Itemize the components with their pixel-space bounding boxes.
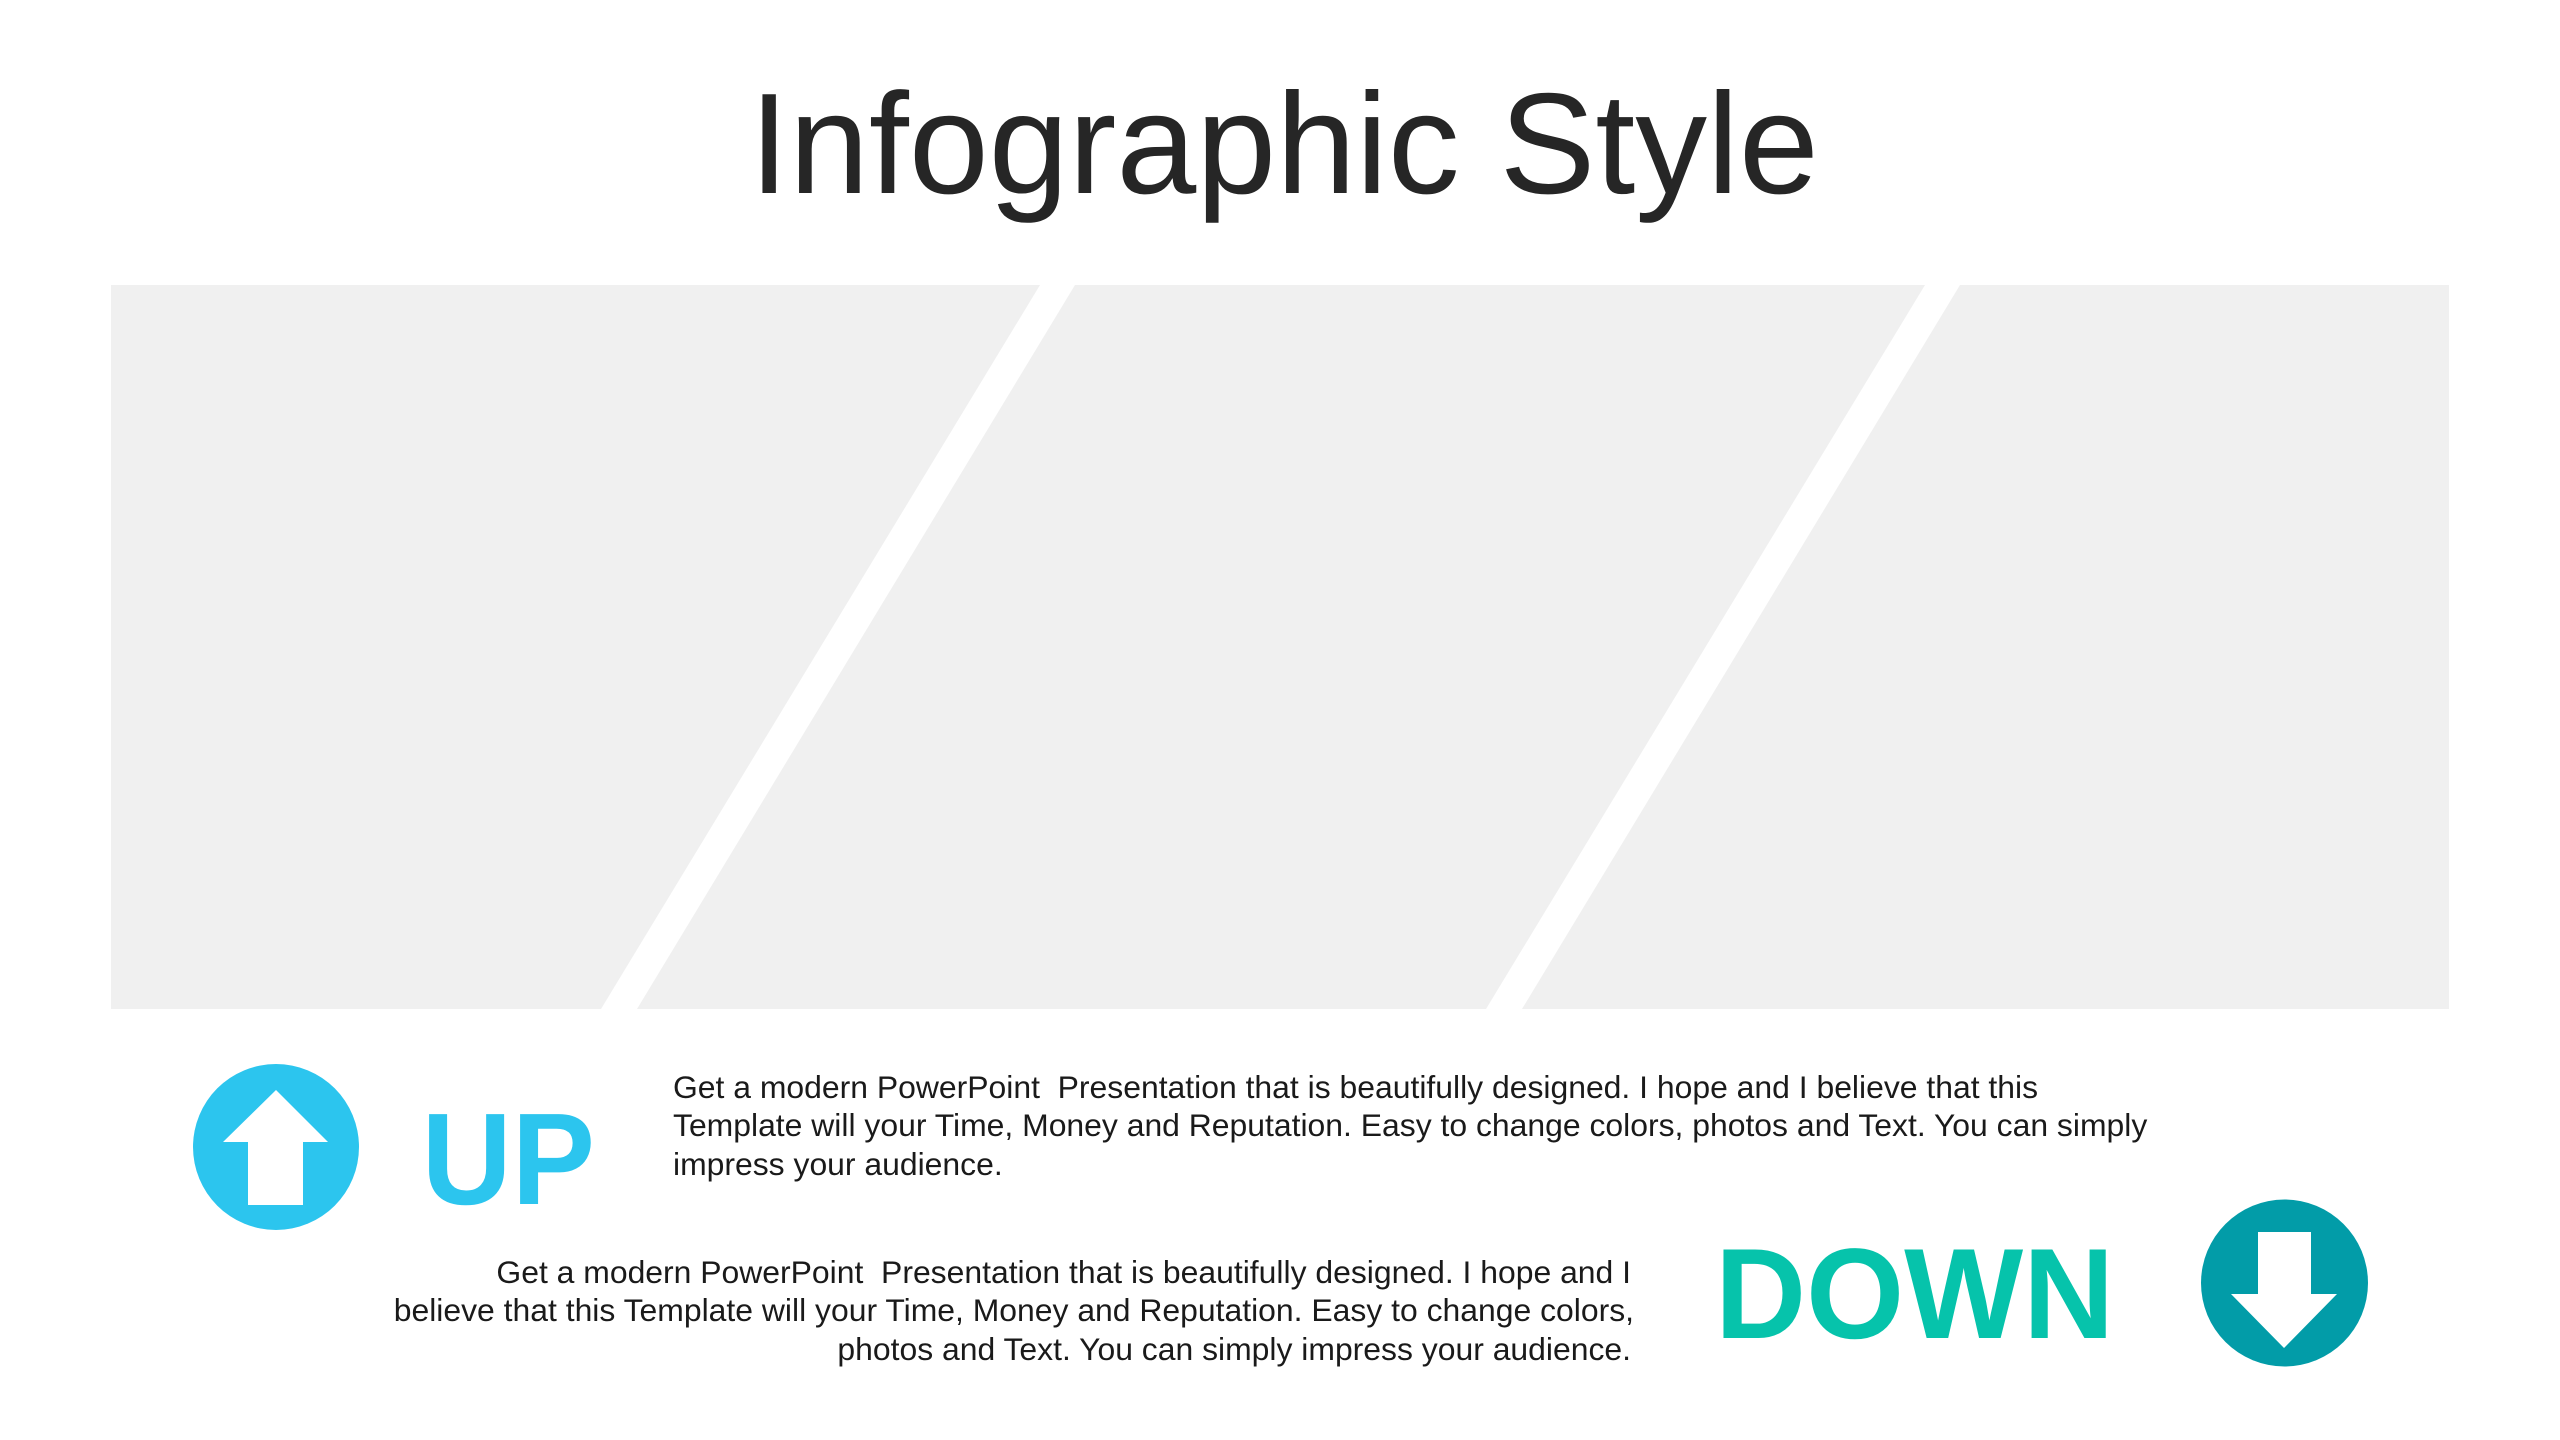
icon: up arrow in circle xyxy=(193,1064,359,1230)
text block: down description: photos and Text. You can simply impress your audience. xyxy=(837,1331,1631,1367)
text block: up description: Template will your Time, Money and Reputation. Easy to change colors, photos and Text. You can simply xyxy=(673,1107,2147,1143)
text block: down description xyxy=(394,1254,1634,1367)
text block: up description: Get a modern PowerPoint Presentation that is beautifully designed. I hope and I believe that this xyxy=(673,1069,2038,1105)
text block: up description: impress your audience. xyxy=(673,1146,1003,1182)
heading: DOWN: DOWN xyxy=(1715,1222,2114,1366)
icon: down arrow in circle xyxy=(2201,1200,2368,1366)
text block: down description: believe that this Template will your Time, Money and Reputation. Easy to change colors, xyxy=(394,1292,1634,1328)
title: Infographic Style xyxy=(749,64,1819,224)
text block: down description: Get a modern PowerPoint Presentation that is beautifully designed. I hope and I xyxy=(496,1254,1631,1290)
heading: UP: UP xyxy=(422,1085,595,1232)
text block: up description xyxy=(673,1069,2148,1182)
